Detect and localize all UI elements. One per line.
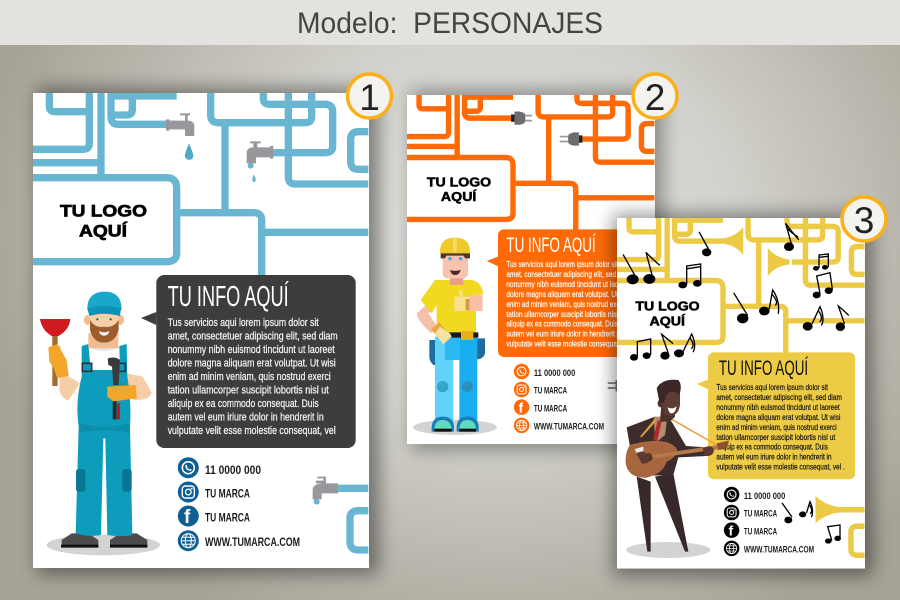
info panel: vulputate velit esse molestie consequat, vel . <box>716 463 845 472</box>
info panel: aliquip ex ea commodo consequat. Duis <box>168 398 319 410</box>
character: musician <box>626 380 729 558</box>
logo placeholder <box>635 300 700 328</box>
info panel: dolore magna aliquam erat volutpat. Ut wisi <box>716 413 841 422</box>
info panel: Tus servicios aqui lorem ipsum dolor sit <box>716 383 828 392</box>
badge 1: 1 <box>359 77 380 118</box>
character: electrician <box>413 238 497 435</box>
contact list: TU MARCA <box>534 403 568 413</box>
info panel: Tus servicios aqui lorem ipsum dolor sit <box>168 317 319 329</box>
info panel: tation ullamcorper suscipit lobortis nisl ut <box>716 433 836 442</box>
info panel: nonummy nibh euismod tincidunt ut laoreet <box>168 344 335 356</box>
contact list: WWW.TUMARCA.COM <box>205 535 300 549</box>
pipes: blue <box>33 93 368 550</box>
info panel <box>487 229 645 357</box>
info panel: TU INFO AQUÍ <box>506 232 596 257</box>
poster shadow 1 <box>37 88 379 574</box>
info panel: vulputate velit esse molestie consequat, vel <box>506 340 631 349</box>
info panel: TU INFO AQUÍ <box>168 280 289 313</box>
contact list: 11 0000 000 <box>205 463 261 477</box>
badge 3 <box>842 197 886 241</box>
info panel: dolore magna aliquam erat volutpat. Ut wisi <box>506 290 631 299</box>
logo placeholder <box>60 202 147 241</box>
contact list: WWW.TUMARCA.COM <box>534 421 604 431</box>
info panel: nonummy nibh euismod tincidunt ut laoreet <box>716 403 840 412</box>
info panel: amet, consectetuer adipiscing elit, sed diam <box>506 270 632 279</box>
badge 2 <box>633 74 677 118</box>
contact list: f <box>728 522 733 538</box>
pipes: yellow <box>617 218 864 555</box>
pipes: orange <box>407 95 654 230</box>
contact list: TU MARCA <box>534 385 568 395</box>
contact list: 11 0000 000 <box>534 368 575 378</box>
logo placeholder: TU LOGO <box>427 175 491 189</box>
icons: plugs <box>511 111 619 390</box>
title bar: Modelo: PERSONAJES <box>297 7 603 40</box>
icons: faucets and drops <box>166 113 338 505</box>
info panel: tation ullamcorper suscipit lobortis nisl ut <box>506 310 626 319</box>
badge 1 <box>348 74 392 118</box>
logo placeholder: AQUÍ <box>79 222 128 241</box>
poster shadow 3 <box>613 214 873 576</box>
badge 2: 2 <box>645 77 665 118</box>
title bar <box>0 0 900 45</box>
contact list <box>724 487 814 556</box>
poster 2: electrician <box>407 95 655 444</box>
info panel <box>141 275 356 448</box>
poster shadow 2 <box>411 90 663 450</box>
contact list <box>514 364 604 433</box>
poster 1: plumber <box>33 93 369 568</box>
logo placeholder: AQUÍ <box>649 313 685 328</box>
contact list: TU MARCA <box>205 486 250 500</box>
info panel: aliquip ex ea commodo consequat. Duis <box>716 443 828 452</box>
logo placeholder: TU LOGO <box>635 300 700 314</box>
info panel: vulputate velit esse molestie consequat, vel <box>168 425 336 437</box>
info panel: TU INFO AQUÍ <box>719 355 808 380</box>
info panel <box>697 352 855 479</box>
info panel: autem vel eum iriure dolor in hendrerit in <box>506 330 622 339</box>
poster 3: musician <box>617 218 865 569</box>
info panel: Tus servicios aqui lorem ipsum dolor sit <box>506 260 618 269</box>
contact list: TU MARCA <box>744 508 778 518</box>
contact list: TU MARCA <box>205 511 250 525</box>
badge 3: 3 <box>854 200 874 241</box>
contact list <box>178 457 300 551</box>
info panel: amet, consectetuer adipiscing elit, sed diam <box>716 393 842 402</box>
contact list: WWW.TUMARCA.COM <box>744 544 814 554</box>
music notes <box>623 223 848 544</box>
info panel: aliquip ex ea commodo consequat. Duis <box>506 320 618 329</box>
info panel: enim ad minim veniam, quis nostrud exerci <box>168 371 331 383</box>
info panel: nonummy nibh euismod tincidunt ut laoreet <box>506 280 630 289</box>
contact list: f <box>184 507 191 528</box>
info panel: enim ad minim veniam, quis nostrud exerci <box>506 300 627 309</box>
contact list: 11 0000 000 <box>744 491 785 501</box>
logo placeholder <box>427 175 491 204</box>
contact list: TU MARCA <box>744 526 778 536</box>
logo placeholder: AQUÍ <box>441 189 477 204</box>
info panel: autem vel eum iriure dolor in hendrerit in <box>168 412 324 424</box>
logo placeholder: TU LOGO <box>60 202 147 221</box>
contact list: f <box>518 399 523 415</box>
icons: trumpet bells <box>721 227 841 523</box>
info panel: autem vel eum iriure dolor in hendrerit in <box>716 453 832 462</box>
info panel: enim ad minim veniam, quis nostrud exerci <box>716 423 837 432</box>
info panel: amet, consectetuer adipiscing elit, sed diam <box>168 330 338 342</box>
info panel: dolore magna aliquam erat volutpat. Ut wisi <box>168 358 336 370</box>
info panel: tation ullamcorper suscipit lobortis nisl ut <box>168 384 329 396</box>
character: plumber <box>40 292 160 555</box>
